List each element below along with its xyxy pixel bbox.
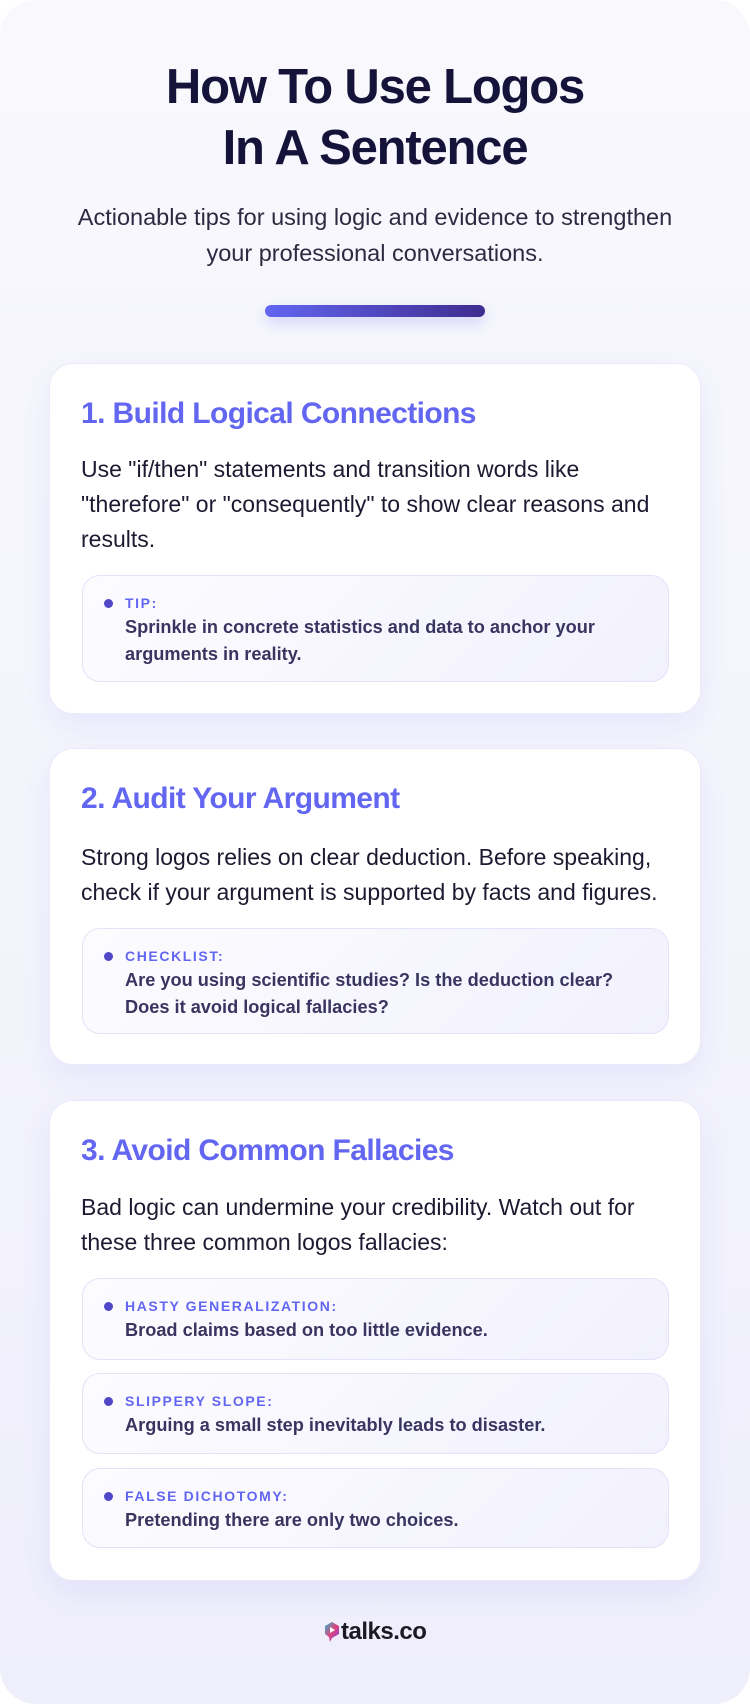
body 1: "therefore" or "consequently" to show clear reasons and: [81, 491, 649, 517]
title: In A Sentence: [223, 121, 527, 175]
brand text: talks.co: [341, 1618, 426, 1645]
body 3: Bad logic can undermine your credibility. Watch out for: [81, 1194, 635, 1220]
panel: build logical connections: [49, 363, 701, 714]
checklist box: Are you using scientific studies? Is the deduction clear?: [125, 970, 613, 990]
fallacy: slippery slope: [82, 1373, 669, 1454]
body 2: Strong logos relies on clear deduction. Before speaking,: [81, 844, 651, 870]
panel: audit your argument: [49, 748, 701, 1065]
tip box: TIP:: [125, 595, 158, 611]
fallacy: false dichotomy: Pretending there are only two choices.: [125, 1510, 459, 1530]
body 1: Use "if/then" statements and transition words like: [81, 456, 579, 482]
heading 3: 3. Avoid Common Fallacies: [81, 1134, 454, 1167]
heading 1: 1. Build Logical Connections: [81, 397, 476, 430]
footer logo: [325, 1618, 426, 1645]
tip box: [82, 575, 669, 682]
body 3: these three common logos fallacies:: [81, 1229, 448, 1255]
fallacy: false dichotomy: FALSE DICHOTOMY:: [125, 1488, 289, 1504]
checklist box: Does it avoid logical fallacies?: [125, 997, 389, 1017]
panel: avoid common fallacies: [49, 1100, 701, 1581]
checklist box: [82, 928, 669, 1034]
fallacy: slippery slope: Arguing a small step inevitably leads to disaster.: [125, 1415, 545, 1435]
accent bar: [265, 305, 485, 317]
body 2: [81, 844, 658, 905]
body 2: check if your argument is supported by facts and figures.: [81, 879, 658, 905]
body 3: [81, 1194, 635, 1255]
title: [166, 60, 584, 175]
fallacy: false dichotomy: [82, 1468, 669, 1548]
tip box: arguments in reality.: [125, 644, 302, 664]
subtitle: [78, 204, 672, 266]
icon: logo mark: [325, 1622, 339, 1642]
heading 2: 2. Audit Your Argument: [81, 782, 399, 815]
subtitle: Actionable tips for using logic and evidence to strengthen: [78, 204, 672, 230]
fallacy: slippery slope: SLIPPERY SLOPE:: [125, 1393, 273, 1409]
tip box: Sprinkle in concrete statistics and data to anchor your: [125, 617, 595, 637]
fallacy: hasty generalization: HASTY GENERALIZATION:: [125, 1298, 338, 1314]
title: How To Use Logos: [166, 60, 584, 114]
fallacy: hasty generalization: Broad claims based on too little evidence.: [125, 1320, 488, 1340]
body 1: [81, 456, 649, 552]
subtitle: your professional conversations.: [206, 240, 544, 266]
checklist box: CHECKLIST:: [125, 948, 224, 964]
body 1: results.: [81, 526, 155, 552]
fallacy: hasty generalization: [82, 1278, 669, 1360]
